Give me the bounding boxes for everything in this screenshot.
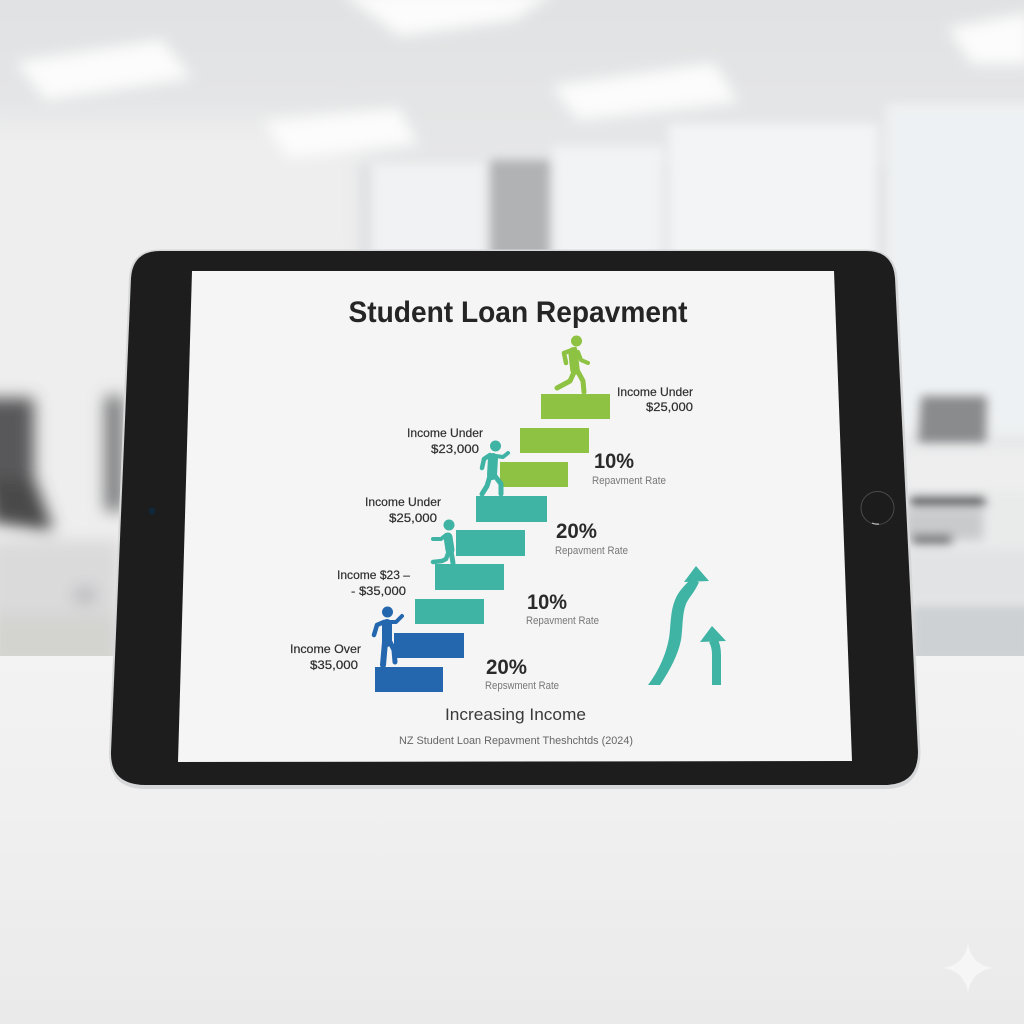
repayment rates xyxy=(485,450,666,692)
rate: 20% upper: 20% xyxy=(556,520,597,543)
windows xyxy=(360,104,1024,434)
rate: 10% lower xyxy=(526,591,599,627)
label: under 25,000 top xyxy=(617,385,693,414)
axis label: Increasing Income xyxy=(445,705,586,724)
figure: teal climber upper xyxy=(482,440,508,494)
label: 23 to 35,000: - $35,000 xyxy=(351,584,406,598)
label: over 35,000: $35,000 xyxy=(310,658,358,672)
label: under 23,000: $23,000 xyxy=(431,442,479,456)
rate: 10% lower: Repavment Rate xyxy=(526,615,599,627)
title: Student Loan Repavment xyxy=(348,296,688,329)
rate: 10% lower: 10% xyxy=(527,591,567,614)
rate: 20% lower: Repswment Rate xyxy=(485,680,559,692)
figure: teal climber lower xyxy=(433,520,454,563)
figure: green walker xyxy=(557,336,588,392)
steps: blue xyxy=(375,633,464,692)
income labels xyxy=(290,385,693,672)
label: under 23,000: Income Under xyxy=(407,426,483,440)
rate: 20% lower xyxy=(485,656,559,692)
staircase chart xyxy=(375,394,610,692)
label: under 25,000 lower xyxy=(365,495,441,525)
label: under 25,000 top: $25,000 xyxy=(646,400,693,414)
label: under 23,000 xyxy=(407,426,483,456)
rate: 10% top: Repavment Rate xyxy=(592,475,666,487)
tablet black bezel xyxy=(111,251,918,785)
home button xyxy=(861,492,894,524)
source note: NZ Student Loan Repavment Theshchtds (2024) xyxy=(399,735,633,747)
steps: green xyxy=(500,394,610,487)
ceiling lights xyxy=(16,0,1024,158)
left chairs xyxy=(0,396,123,670)
rate: 10% top xyxy=(592,450,666,487)
rate: 20% lower: 20% xyxy=(486,656,527,679)
steps: teal xyxy=(415,496,547,624)
label: under 25,000 top: Income Under xyxy=(617,385,693,399)
tablet silver edge xyxy=(109,250,921,789)
label: over 35,000 xyxy=(290,642,361,672)
label: under 25,000 lower: $25,000 xyxy=(389,511,437,525)
label: over 35,000: Income Over xyxy=(290,642,361,656)
screen xyxy=(178,271,852,762)
small arrow xyxy=(700,626,726,685)
large arrow xyxy=(648,566,709,685)
tablet xyxy=(109,250,921,789)
figure: blue climber xyxy=(374,606,402,665)
rate: 20% upper xyxy=(555,520,628,557)
icon: sparkle watermark xyxy=(944,944,992,992)
label: under 25,000 lower: Income Under xyxy=(365,495,441,509)
right chair and table xyxy=(905,396,1024,665)
label: 23 to 35,000: Income $23 – xyxy=(337,568,410,582)
rate: 10% top: 10% xyxy=(594,450,634,473)
label: 23 to 35,000 xyxy=(337,568,410,598)
white desk surface xyxy=(0,656,1024,1024)
camera dot xyxy=(148,508,156,514)
rate: 20% upper: Repavment Rate xyxy=(555,545,628,557)
icon: rising arrows xyxy=(648,566,726,685)
